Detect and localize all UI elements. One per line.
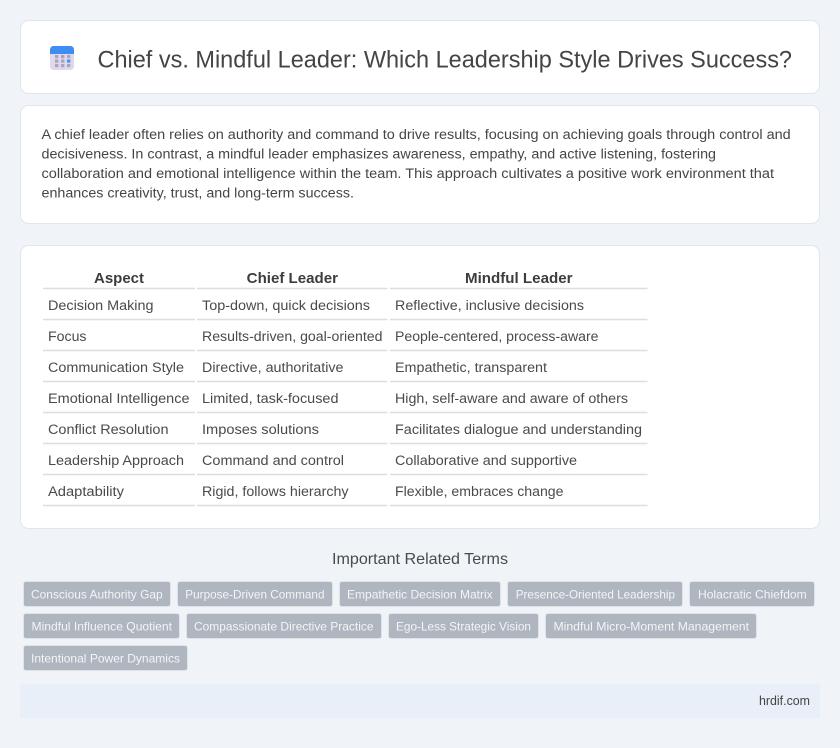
table header row: Mindful Leader xyxy=(465,270,573,287)
text block: introduction xyxy=(42,127,791,202)
text block: introduction: collaboration and emotional intelligence within the team. This approach cultivates a positive work environment that xyxy=(42,166,774,182)
tag xyxy=(24,646,188,670)
footer: hrdif.com xyxy=(759,693,810,708)
panel: comparison table xyxy=(20,246,820,528)
table row: adaptability: Adaptability xyxy=(48,484,125,500)
tag: Ego-Less Strategic Vision xyxy=(396,619,531,633)
tag xyxy=(546,614,756,638)
tag: Purpose-Driven Command xyxy=(185,587,324,601)
table row: communication style: Empathetic, transparent xyxy=(395,360,547,376)
tag xyxy=(508,582,682,606)
tag: Intentional Power Dynamics xyxy=(31,651,180,665)
panel: related term tags xyxy=(24,582,814,670)
table row: decision making xyxy=(43,298,648,320)
table row: decision making: Top-down, quick decisions xyxy=(202,298,370,314)
tag xyxy=(690,582,814,606)
tag xyxy=(388,614,538,638)
table row: leadership approach xyxy=(43,453,648,474)
table row: leadership approach: Collaborative and supportive xyxy=(395,453,577,469)
panel: header xyxy=(20,20,820,94)
table row: leadership approach: Command and control xyxy=(202,453,344,469)
table row: conflict resolution: Conflict Resolution xyxy=(48,422,168,438)
tag xyxy=(340,582,500,606)
table header row: Aspect xyxy=(94,270,144,287)
table row: emotional intelligence xyxy=(43,391,648,412)
panel: introduction xyxy=(20,106,820,224)
table row: communication style xyxy=(43,360,648,382)
tag: Presence-Oriented Leadership xyxy=(516,587,675,601)
table row: decision making: Decision Making xyxy=(48,298,154,314)
tag: Mindful Micro-Moment Management xyxy=(554,619,750,633)
table row: communication style: Communication Style xyxy=(48,360,184,376)
tag: Conscious Authority Gap xyxy=(31,587,163,601)
text block: introduction: decisiveness. In contrast, a mindful leader emphasizes awareness, empathy, and active listening, fostering xyxy=(42,146,716,162)
tag: Mindful Influence Quotient xyxy=(32,619,173,633)
table row: focus: Focus xyxy=(48,329,86,345)
icon: calendar xyxy=(50,46,74,70)
tag: Holacratic Chiefdom xyxy=(698,587,807,601)
heading: related terms: Important Related Terms xyxy=(332,551,508,568)
table row: adaptability: Rigid, follows hierarchy xyxy=(202,484,349,500)
table row: communication style: Directive, authoritative xyxy=(202,360,344,376)
tag xyxy=(178,582,332,606)
table row: focus: Results-driven, goal-oriented xyxy=(202,329,382,345)
tag xyxy=(24,614,180,638)
tag: Empathetic Decision Matrix xyxy=(347,587,493,601)
table header row: Chief Leader xyxy=(247,270,338,287)
table row: focus xyxy=(43,329,648,350)
table row: decision making: Reflective, inclusive decisions xyxy=(395,298,584,314)
table row: adaptability xyxy=(43,484,648,506)
table row: emotional intelligence: Emotional Intelligence xyxy=(48,391,190,407)
tag xyxy=(24,582,170,606)
table row: emotional intelligence: Limited, task-focused xyxy=(202,391,338,407)
table row: adaptability: Flexible, embraces change xyxy=(395,484,564,500)
text block: introduction: A chief leader often relies on authority and command to drive results, focusing on achieving goals through control and xyxy=(42,127,791,143)
table header row xyxy=(43,270,648,288)
table row: conflict resolution: Imposes solutions xyxy=(202,422,319,438)
table row: emotional intelligence: High, self-aware and aware of others xyxy=(395,391,628,407)
table row: conflict resolution: Facilitates dialogue and understanding xyxy=(395,422,642,438)
title: Chief vs. Mindful Leader: Which Leadership Style Drives Success? xyxy=(98,46,792,74)
tag: Compassionate Directive Practice xyxy=(194,619,374,633)
footer xyxy=(20,684,820,718)
table row: conflict resolution xyxy=(43,422,648,444)
table row: focus: People-centered, process-aware xyxy=(395,329,599,345)
tag xyxy=(186,614,382,638)
table row: leadership approach: Leadership Approach xyxy=(48,453,184,469)
text block: introduction: enhances creativity, trust, and long-term success. xyxy=(42,186,354,202)
